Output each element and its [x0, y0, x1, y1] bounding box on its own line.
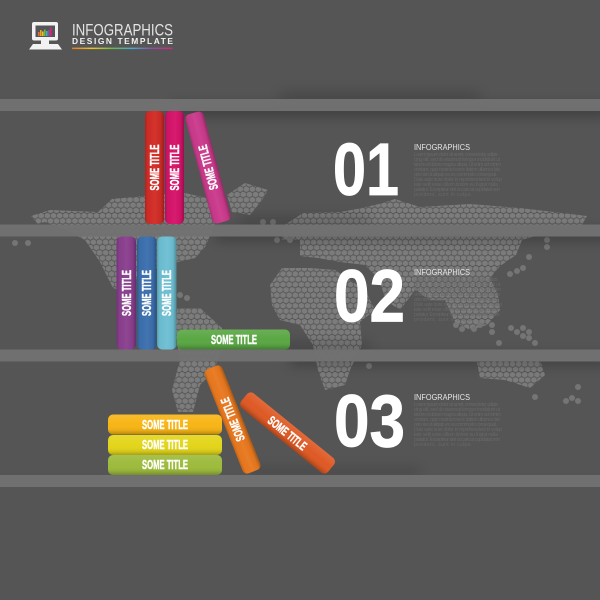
section 01	[333, 128, 502, 211]
body text 03: oris nisi ut aliquip ex ea commodo consequat.	[414, 422, 497, 428]
header title: INFOGRAPHICS	[72, 20, 173, 40]
number 03: 03	[334, 380, 405, 462]
body text 01: labore et dolore magna aliqua. Ut enim ad minim	[414, 162, 501, 168]
body text 02: tate velit esse cillum dolore eu fugiat nulla	[414, 307, 498, 313]
body text 03: tate velit esse cillum dolore eu fugiat nulla	[414, 432, 498, 438]
body text 01: pariatur. Excepteur sint occaecat cupidatat non	[414, 187, 500, 193]
header logo	[29, 20, 173, 50]
body text 01: oris nisi ut aliquip ex ea commodo consequat.	[414, 172, 497, 178]
rainbow underline	[72, 48, 172, 49]
heading 01: INFOGRAPHICS	[414, 142, 470, 152]
header subtitle: DESIGN TEMPLATE	[72, 36, 173, 46]
book: orange leaning: SOME TITLE	[218, 395, 248, 443]
book: magenta leaning: SOME TITLE	[196, 143, 221, 191]
body text 03: cing elit, sed do eiusmod tempor incididunt ut	[414, 407, 501, 413]
number 01: 01	[333, 128, 399, 211]
book: cyan	[157, 236, 176, 350]
body text 03: veniam, quis nostrud exerc itation ullamco lab	[414, 417, 500, 423]
book: pink: SOME TITLE	[168, 144, 182, 190]
body text 02: proident, sunt in culpa.	[414, 317, 472, 323]
body text 01: veniam, quis nostrud exerc itation ullamco lab	[414, 167, 500, 173]
body text 02	[414, 277, 502, 323]
book: green lying: SOME TITLE	[211, 333, 257, 347]
body text 02: labore et dolore magna aliqua. Ut enim ad minim	[414, 287, 501, 293]
shelves	[0, 99, 600, 487]
book: cyan: SOME TITLE	[160, 270, 174, 316]
book: blue: SOME TITLE	[140, 270, 154, 316]
heading 02: INFOGRAPHICS	[414, 267, 470, 277]
body text 02: Lorem ipsum dolor sit amet, consectetur adipis	[414, 277, 498, 283]
body text 01: Duis aute irure dolor in reprehenderit in volup	[414, 177, 502, 183]
body text 01: proident, sunt in culpa.	[414, 192, 472, 198]
book: amber lying: SOME TITLE	[142, 418, 188, 432]
body text 02: Duis aute irure dolor in reprehenderit in volup	[414, 302, 502, 308]
book: lime lying: SOME TITLE	[142, 458, 188, 472]
book: green lying	[177, 330, 290, 350]
body text 02: veniam, quis nostrud exerc itation ullamco lab	[414, 292, 500, 298]
dotted world map	[12, 183, 587, 412]
book: purple: SOME TITLE	[120, 270, 134, 316]
body text 03: labore et dolore magna aliqua. Ut enim ad minim	[414, 412, 501, 418]
section 03	[334, 380, 502, 462]
heading 03: INFOGRAPHICS	[414, 392, 470, 402]
body text 03: pariatur. Excepteur sint occaecat cupidatat non	[414, 437, 500, 443]
body text 03: proident, sunt in culpa.	[414, 442, 472, 448]
panel: shelf 1 books	[145, 110, 232, 225]
book: amber lying	[108, 414, 222, 434]
body text 02: cing elit, sed do eiusmod tempor incididunt ut	[414, 282, 501, 288]
body text 03: Duis aute irure dolor in reprehenderit in volup	[414, 427, 502, 433]
book: yellow lying	[108, 435, 222, 455]
book: red: SOME TITLE	[148, 144, 162, 190]
book: blue	[137, 236, 156, 350]
body text 02: oris nisi ut aliquip ex ea commodo consequat.	[414, 297, 497, 303]
body text 03: Lorem ipsum dolor sit amet, consectetur adipis	[414, 402, 498, 408]
body text 02: pariatur. Excepteur sint occaecat cupidatat non	[414, 312, 500, 318]
shelf shadows	[170, 92, 600, 475]
book: red-orange leaning	[238, 390, 337, 476]
body text 01: cing elit, sed do eiusmod tempor incididunt ut	[414, 157, 501, 163]
body text 01: Lorem ipsum dolor sit amet, consectetur adipis	[414, 152, 498, 158]
body text 01	[414, 152, 502, 198]
body text 01: tate velit esse cillum dolore eu fugiat nulla	[414, 182, 498, 188]
book: yellow lying: SOME TITLE	[142, 438, 188, 452]
book: red-orange leaning: SOME TITLE	[265, 413, 309, 453]
book: purple	[116, 236, 136, 350]
body text 03	[414, 402, 502, 448]
panel: shelf 3 books	[108, 364, 337, 476]
panel: shelf 2 books	[116, 236, 290, 350]
section 02	[334, 254, 502, 338]
book: orange leaning	[203, 364, 262, 475]
icon: computer monitor	[29, 22, 62, 50]
book: lime lying	[108, 455, 222, 475]
number 02: 02	[334, 254, 405, 338]
